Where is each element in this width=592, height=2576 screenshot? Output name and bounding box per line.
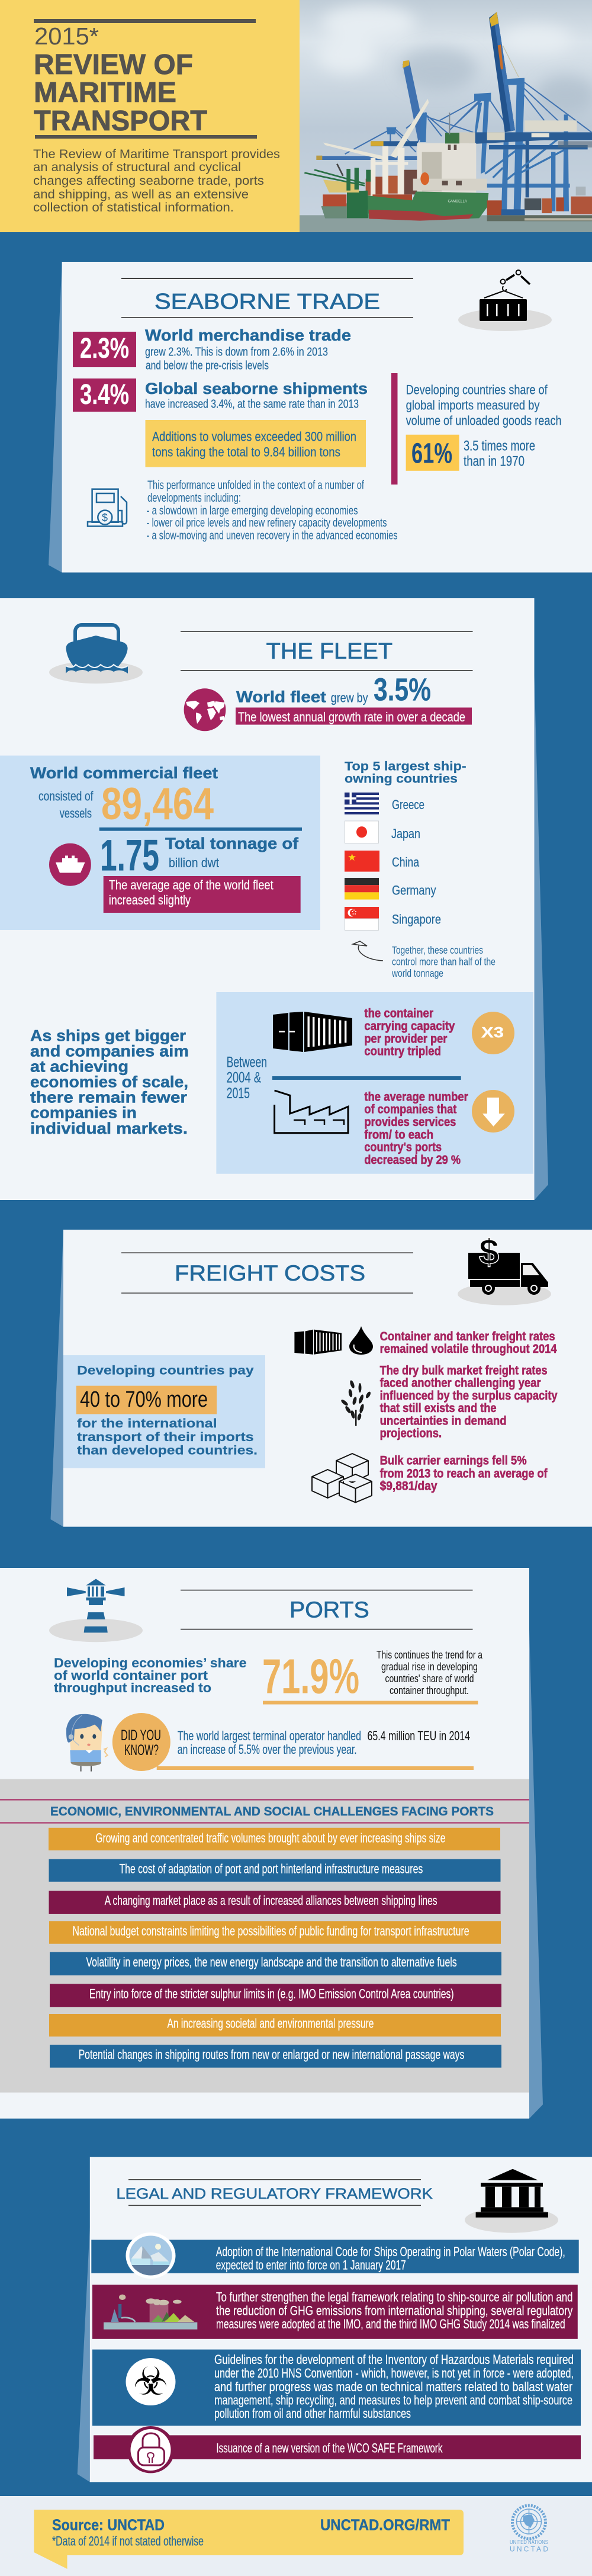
heading: legal framework: LEGAL AND REGULATORY FRAMEWORK [116,2186,433,2202]
challenge bar 1: Growing and concentrated traffic volumes brought about by ever increasing ships size [95,1830,445,1845]
icon: cardboard boxes [312,1454,372,1503]
icon: character with headset [66,1714,108,1772]
note: world tonnage [391,944,496,979]
top 5 ship-owning countries: Japan [391,826,420,841]
world fleet growth heading: 3.5% [374,672,431,707]
text: container capacity [364,1007,455,1058]
text: number of companies: provides services [364,1115,456,1129]
context paragraph: - lower oil price levels and new refinery capacity developments [147,517,387,530]
text: dry bulk market: uncertainties in demand [380,1414,507,1427]
band: WCO SAFE framework [94,2426,581,2473]
text: largest terminal operator: 65.4 million TEU in 2014 [367,1728,470,1743]
text: number of companies [364,1090,468,1167]
icon: pollution scene [104,2295,197,2330]
band: hazardous materials: pollution from oil and other harmful substances [214,2406,411,2421]
challenge bar 2: The cost of adaptation of port and port hinterland infrastructure measures [120,1861,423,1876]
icon: crane hook and container [458,270,552,331]
booms of the cranes [403,60,421,140]
icon: grain plant [340,1380,372,1426]
note: world tonnage: world tonnage [391,967,443,979]
band: hazardous materials [92,2350,581,2426]
text: developing economies share [54,1656,246,1695]
world fleet growth heading [236,672,431,707]
note: world tonnage: Together, these countries [392,944,483,956]
icon: container small [294,1330,342,1355]
panel: developing countries pay: transport of their imports [77,1430,254,1444]
text: trend note: This continues the trend for a [377,1649,483,1661]
stern ship hull [367,191,488,220]
band: WCO SAFE framework: Issuance of a new version of the WCO SAFE Framework [216,2440,443,2456]
text: economies of scale: and companies aim [30,1042,189,1060]
highlight: 40 to 70% more: 40 to 70% more [80,1387,208,1412]
title: REVIEW OF [34,49,193,81]
text: trend note [377,1649,483,1696]
world fleet growth heading: World fleet [236,688,326,706]
text: container capacity: country tripled [364,1045,441,1058]
text: trend note: countries' share of world [385,1673,474,1685]
panel: world commercial fleet: Total tonnage of [165,835,299,852]
text: economies of scale: companies in [30,1104,137,1122]
icon: delivery truck: $ [479,1232,499,1272]
text: economies of scale [30,1026,189,1137]
badge: did you know: DID YOU [121,1727,161,1744]
global seaborne shipments text: have increased 3.4%, at the same rate than in 2013 [145,398,359,411]
stat: 71.9%: 71.9% [262,1648,359,1704]
top 5 ship-owning countries: Singapore [392,912,441,926]
badge: did you know: KNOW? [124,1742,159,1759]
intro text: an analysis of structural and cyclical [33,161,241,174]
callout: volumes: Additions to volumes exceeded 300 million [152,429,356,444]
challenge bar 2 [49,1859,501,1882]
context paragraph: - a slowdown in large emerging developing economies [147,505,358,518]
text: bulk carrier earnings: from 2013 to reach an average of [380,1467,548,1481]
callout: average age [104,876,301,913]
developing countries share block: volume of unloaded goods reach [406,413,562,428]
footer [0,2496,592,2576]
callout: lowest growth: The lowest annual growth rate in over a decade [238,710,465,724]
period label: Between [227,1054,267,1071]
icon: institution building [465,2169,558,2233]
note: world tonnage: control more than half of the [392,956,496,968]
text: largest terminal operator: The world largest terminal operator handled [178,1728,361,1743]
panel: developing countries pay: for the international [77,1416,217,1430]
title: TRANSPORT [34,105,207,137]
challenge bar 6: Entry into force of the stricter sulphur limits in (e.g. IMO Emission Control Area countries) [89,1986,454,2001]
stat badge 61% [406,435,459,471]
top 5 ship-owning countries: Germany [392,883,436,898]
cargo containers on the ship [375,177,382,194]
badge: x3 [472,1012,514,1054]
text: economies of scale: individual markets. [30,1119,188,1137]
icon: shipping container [273,1012,352,1052]
superstructure [417,143,476,193]
horizontal booms [321,156,418,160]
developing countries share block: than in 1970 [464,454,525,469]
panel: between 2004 and 2015 [216,992,533,1174]
top 5 ship-owning countries: Greece [392,797,424,812]
icon: biohazard [126,2358,175,2405]
intro text: The Review of Maritime Transport provides [33,147,280,161]
icon: fuel pump [88,489,127,526]
stat: 1.75 billion dwt: 1.75 [100,831,159,880]
global seaborne shipments text: Global seaborne shipments [145,380,368,397]
developing countries share block [391,373,562,485]
source speech panel [34,2510,464,2569]
developing countries share block: global imports measured by [406,398,540,412]
text: dry bulk market [380,1364,558,1440]
year: 2015* [34,23,99,50]
badge: x3: X3 [481,1025,504,1041]
world merchandise trade text: grew 2.3%. This is down from 2.6% in 2013 [145,346,328,359]
icon: biohazard: ☣ [133,2359,168,2404]
quayside containers [487,200,502,215]
text: trend note: container throughput. [390,1685,469,1696]
band: polar code [91,2232,579,2279]
header photo: container ships and port cranes [300,0,592,232]
top 5 ship-owning countries: owning countries [345,772,458,785]
period label [227,1054,267,1102]
world fleet growth heading: grew by [331,691,368,705]
challenge bar 1 [49,1828,500,1850]
panel: world commercial fleet [0,756,320,930]
panel: developing countries pay: Developing countries pay [77,1363,254,1377]
context paragraph [147,479,398,543]
icon: lighthouse [49,1579,143,1642]
main crane frames [387,78,570,213]
period label: 2015 [227,1085,250,1102]
challenge bar 3: A changing market place as a result of increased alliances between shipping lines [105,1893,437,1908]
heading: seaborne trade: SEABORNE TRADE [155,289,380,314]
icon: factory [275,1090,348,1133]
challenge bar 3 [49,1891,501,1914]
text: developing economies share: Developing economies’ share [54,1656,246,1670]
context paragraph: - a slow-moving and uneven recovery in the advanced economies [147,530,398,543]
text: developing economies share: throughput increased to [54,1680,211,1695]
text: largest terminal operator: an increase of 5.5% over the previous year. [178,1742,357,1757]
badge: did you know [112,1713,170,1771]
panel: port challenges [0,1779,529,2093]
logo: United Nations UNCTAD: UNITED NATIONS [510,2539,548,2546]
challenge bar 5 [50,1952,501,1975]
source speech panel: UNCTAD.ORG/RMT [320,2516,450,2534]
panel: developing countries pay: than developed countries. [77,1443,258,1457]
icon: fuel pump: $ [102,512,108,524]
text: number of companies: the average number [364,1090,468,1103]
callout: volumes: tons taking the total to 9.84 billion tons [152,444,340,460]
badge: down arrow [472,1090,514,1133]
icon: ship in circle [49,843,91,886]
panel: world commercial fleet: vessels [60,806,92,821]
panel: seaborne trade [49,262,592,572]
challenge bar 5: Volatility in energy prices, the new energy landscape and the transition to alternative fuels [86,1955,457,1969]
text: dry bulk market: projections. [380,1426,442,1440]
text: economies of scale: there remain fewer [30,1088,188,1106]
title: MARITIME [34,76,176,108]
context paragraph: developments including: [147,492,241,505]
source speech panel: Source: UNCTAD [52,2516,165,2534]
icon: polar iceberg [126,2232,175,2279]
text: container and tanker rates [380,1330,557,1356]
text: economies of scale: As ships get bigger [30,1026,186,1044]
text: number of companies: country's ports [364,1141,442,1154]
challenge bar 7 [49,2014,501,2036]
challenge bar 7: An increasing societal and environmental pressure [167,2016,374,2030]
challenge bar 8 [50,2045,501,2068]
text: developing economies share: of world container port [54,1668,208,1683]
stat: 89,464 vessels: 89,464 [101,779,214,829]
global seaborne shipments text [145,380,368,411]
flag: Japan [345,821,379,843]
text: container capacity: carrying capacity [364,1019,455,1033]
arrow: note to flags [353,941,383,961]
stat badge 61%: 61% [411,438,452,469]
top 5 ship-owning countries: China [392,855,420,870]
icon: world map globe [184,688,226,731]
callout: volumes [146,420,366,467]
callout: average age: increased slightly [109,893,191,907]
period label: 2004 & [227,1070,261,1086]
text: dry bulk market: The dry bulk market freight rates [380,1364,548,1377]
text: container and tanker rates: Container and tanker freight rates [380,1330,555,1343]
white deck cranes of the ship [390,99,429,158]
text: number of companies: decreased by 29 % [364,1153,461,1167]
panel: world commercial fleet: World commercial fleet [30,764,218,782]
text: bulk carrier earnings [380,1454,548,1493]
intro text [33,147,280,214]
icon: oil drop [349,1326,373,1355]
panel: world commercial fleet: billion dwt [169,855,219,870]
panel: ports [0,1568,543,2119]
intro text: collection of statistical information. [33,201,234,214]
heading: challenges: ECONOMIC, ENVIRONMENTAL AND SOCIAL CHALLENGES FACING PORTS [50,1805,494,1818]
flag: China: ★ [348,852,356,863]
top 5 ship-owning countries: Top 5 largest ship- [345,759,466,774]
front ship [321,191,368,218]
world merchandise trade text: World merchandise trade [145,326,351,344]
developing countries share block: Developing countries share of [406,383,548,397]
text: bulk carrier earnings: Bulk carrier earnings fell 5% [380,1454,527,1468]
text: container capacity: per provider per [364,1032,447,1045]
stat badge 3.4%: 3.4% [80,379,129,410]
context paragraph: This performance unfolded in the context of a number of [147,479,364,492]
band: polar code: expected to enter into force on 1 January 2017 [216,2257,406,2272]
far crane ties [345,79,591,154]
challenge bar 6 [50,1984,501,2007]
icon: padlock [127,2426,175,2473]
challenge bar 4 [49,1921,501,1944]
stat badge 2.3%: 2.3% [80,333,129,364]
panel: world commercial fleet: consisted of [38,788,94,803]
hull name: GAMBELLA [448,200,467,204]
source speech panel: *Data of 2014 if not stated otherwise [52,2534,204,2548]
text: dry bulk market: that still exists and the [380,1401,497,1415]
flag: China [345,851,379,872]
text: bulk carrier earnings: $9,881/day [380,1480,437,1493]
panel: the fleet [0,598,548,1200]
logo: United Nations UNCTAD: UNCTAD [510,2545,548,2553]
text: economies of scale: economies of scale, [30,1073,188,1090]
callout: average age: The average age of the world fleet [109,877,274,892]
icon: ship [49,625,143,684]
header: intro panel [0,0,300,232]
icon: delivery truck [458,1232,551,1305]
heading: ports: PORTS [289,1598,369,1623]
text: largest terminal operator [178,1728,470,1757]
text: container capacity: the container [364,1007,433,1021]
panel: freight costs [51,1230,592,1527]
text: number of companies: of companies that [364,1103,456,1117]
title [34,49,207,137]
intro text: changes affecting seaborne trade, ports [33,174,264,188]
text: economies of scale: at achieving [30,1057,128,1075]
text: dry bulk market: influenced by the surplus capacity [380,1389,558,1403]
text: dry bulk market: faced another challenging year [380,1377,541,1390]
top 5 ship-owning countries [345,759,496,979]
heading: the fleet: THE FLEET [266,639,392,664]
band: air pollution [92,2285,578,2339]
text: container and tanker rates: remained volatile throughout 2014 [380,1342,557,1356]
flag: Germany [345,878,379,900]
text: trend note: gradual rise in developing [381,1661,478,1673]
world merchandise trade text: and below the pre-crisis levels [146,359,269,372]
flag: Greece [345,793,379,814]
intro text: and shipping, as well as an extensive [33,188,249,201]
panel: developing countries pay [63,1355,265,1468]
flag: Singapore [345,907,379,930]
developing countries share block: 3.5 times more [464,438,535,454]
panel: legal and regulatory framework [78,2157,592,2482]
text: number of companies: from/ to each [364,1128,433,1141]
logo: United Nations UNCTAD [510,2506,548,2553]
heading: freight costs: FREIGHT COSTS [175,1261,365,1285]
world merchandise trade text [145,326,351,372]
